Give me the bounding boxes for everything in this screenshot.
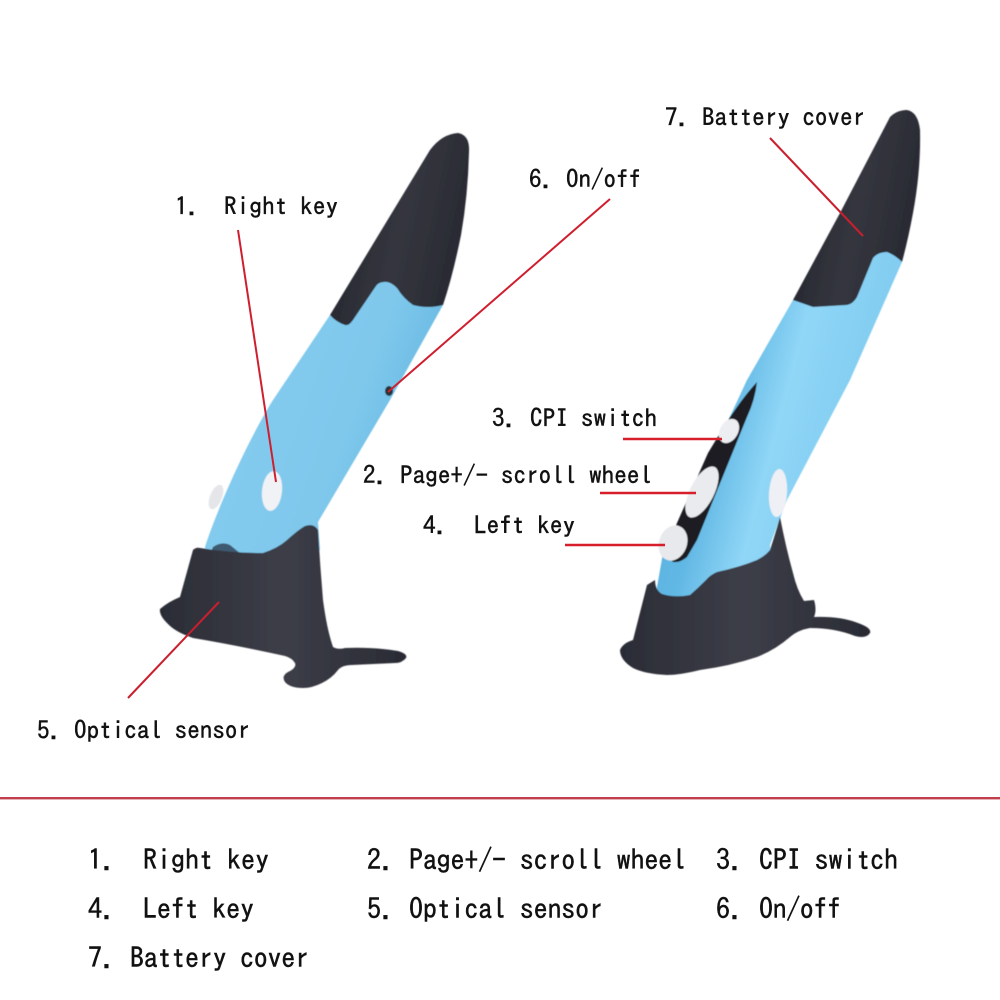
leader line: on/off — [388, 199, 610, 392]
left pen side button — [206, 483, 226, 511]
scroll wheel — [679, 462, 725, 522]
item 6 — [716, 895, 841, 923]
left pen body — [205, 270, 443, 565]
left pen sensor notch — [211, 543, 241, 554]
label: right key: 1. — [175, 194, 200, 219]
right pen cap — [793, 110, 920, 307]
item 1: Right key — [143, 846, 269, 874]
label: scroll wheel: 2. — [363, 463, 388, 488]
right pen body — [657, 235, 902, 605]
item 7: 7. — [88, 944, 116, 972]
leader line: left key — [565, 544, 665, 546]
label: battery cover: Battery cover — [702, 105, 865, 130]
item 5: Optical sensor — [409, 895, 603, 923]
label: left key: Left key — [474, 513, 575, 538]
label: right key: Right key — [224, 194, 338, 219]
left stand — [160, 525, 406, 688]
leader line: optical sensor — [128, 602, 219, 698]
item 4: 4. — [88, 895, 116, 923]
item 6: On/off — [759, 895, 841, 923]
divider — [0, 797, 1000, 799]
leader line: scroll wheel — [600, 492, 696, 494]
item 1 — [88, 846, 269, 874]
left pen mouse — [160, 133, 469, 688]
label: left key: 4. — [423, 513, 448, 538]
left pen on/off hole — [385, 386, 393, 396]
leader line: right key — [238, 230, 276, 482]
item 2: Page+/- scroll wheel — [409, 846, 686, 874]
item 7: Battery cover — [130, 944, 309, 972]
label: on/off — [529, 166, 641, 192]
right pen side button — [767, 468, 789, 518]
label: right key — [175, 194, 338, 219]
label: optical sensor: Optical sensor — [74, 718, 250, 743]
parts list — [88, 846, 898, 972]
leader line: battery cover — [770, 138, 863, 236]
label: on/off: On/off — [566, 166, 641, 192]
label: optical sensor: 5. — [37, 718, 62, 743]
left pen right key button — [260, 470, 284, 512]
item 3: 3. — [716, 846, 744, 874]
label: CPI switch: CPI switch — [530, 406, 657, 431]
right stand — [620, 517, 870, 675]
right pen button slot — [664, 382, 757, 562]
left key button — [654, 521, 692, 565]
item 2: 2. — [367, 846, 395, 874]
leader line: CPI switch — [623, 438, 722, 440]
right pen mouse — [620, 110, 920, 675]
label: left key — [423, 513, 575, 538]
item 5: 5. — [367, 895, 395, 923]
label: on/off: 6. — [529, 167, 554, 192]
CPI switch button — [715, 415, 743, 447]
item 6: 6. — [716, 895, 744, 923]
item 3: CPI switch — [759, 846, 898, 874]
label: CPI switch: 3. — [492, 406, 517, 431]
label: scroll wheel: Page+/- scroll wheel — [400, 462, 652, 488]
item 1: 1. — [88, 846, 116, 874]
left pen cap — [330, 133, 469, 325]
item 4: Left key — [143, 895, 254, 923]
item 4 — [88, 895, 254, 923]
label: battery cover: 7. — [665, 105, 690, 130]
